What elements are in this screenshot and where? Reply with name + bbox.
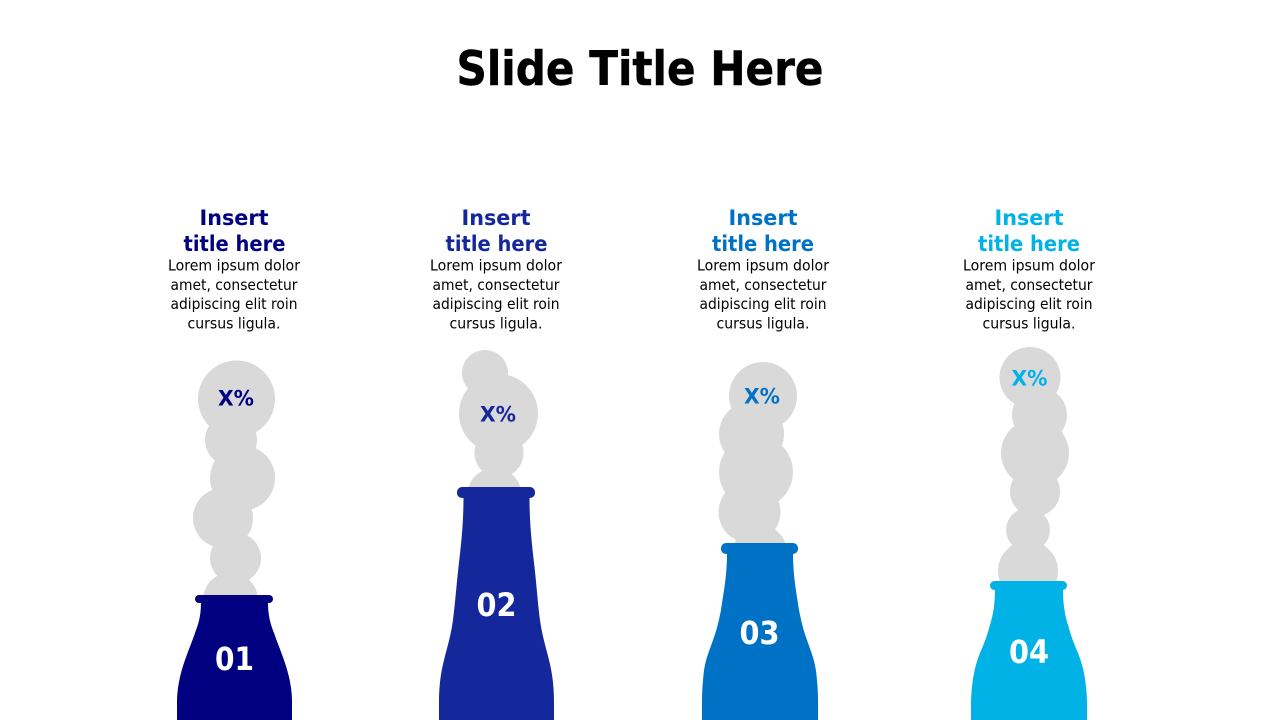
heading 02: title here (446, 232, 548, 256)
heading 01 (184, 206, 286, 256)
text block 04: adipiscing elit roin (966, 295, 1092, 313)
heading 02: Insert (462, 206, 530, 230)
text block 03: amet, consectetur (700, 276, 827, 294)
bottle 04 (971, 581, 1087, 720)
panel: column 04 (963, 206, 1096, 720)
panel: column 03 (697, 206, 830, 720)
text block 03: cursus ligula. (716, 314, 810, 332)
number 02: 02 (476, 586, 516, 624)
text block 01: cursus ligula. (188, 314, 280, 332)
value 02: X% (480, 402, 516, 426)
smoke 04 (998, 347, 1069, 601)
text block 02: Lorem ipsum dolor (430, 256, 563, 274)
heading 03: title here (712, 232, 814, 256)
number 03: 03 (740, 614, 780, 652)
text block 02: amet, consectetur (432, 276, 560, 294)
text block 02: cursus ligula. (450, 314, 542, 332)
value 04: X% (1012, 366, 1048, 390)
smoke 01 (193, 360, 275, 628)
text block 04: cursus ligula. (982, 314, 1076, 332)
panel: column 02 (430, 206, 563, 720)
text block 01: amet, consectetur (170, 276, 298, 294)
bottle 03 (702, 543, 818, 720)
heading 01: title here (184, 232, 286, 256)
heading 04: title here (978, 232, 1080, 256)
smoke 02 (459, 350, 538, 522)
title: Slide Title Here (456, 42, 824, 97)
bottle 01 (177, 595, 292, 720)
heading 02 (446, 206, 548, 256)
heading 04: Insert (994, 206, 1064, 230)
heading 03: Insert (728, 206, 798, 230)
value 03: X% (744, 384, 780, 408)
text block 03: adipiscing elit roin (700, 295, 826, 313)
value 01: X% (218, 386, 254, 410)
text block 04: Lorem ipsum dolor (963, 256, 1096, 274)
text block 03 (697, 256, 830, 332)
heading 03 (712, 206, 814, 256)
text block 01 (168, 256, 301, 332)
text block 03: Lorem ipsum dolor (697, 256, 830, 274)
text block 01: Lorem ipsum dolor (168, 256, 301, 274)
text block 02 (430, 256, 563, 332)
number 04: 04 (1009, 633, 1049, 671)
text block 04: amet, consectetur (966, 276, 1093, 294)
text block 02: adipiscing elit roin (432, 295, 560, 313)
text block 01: adipiscing elit roin (170, 295, 298, 313)
number 01: 01 (215, 640, 254, 678)
text block 04 (963, 256, 1096, 332)
smoke 03 (718, 362, 797, 579)
heading 01: Insert (200, 206, 268, 230)
heading 04 (978, 206, 1080, 256)
bottle 02 (439, 487, 554, 720)
panel: column 01 (168, 206, 301, 720)
